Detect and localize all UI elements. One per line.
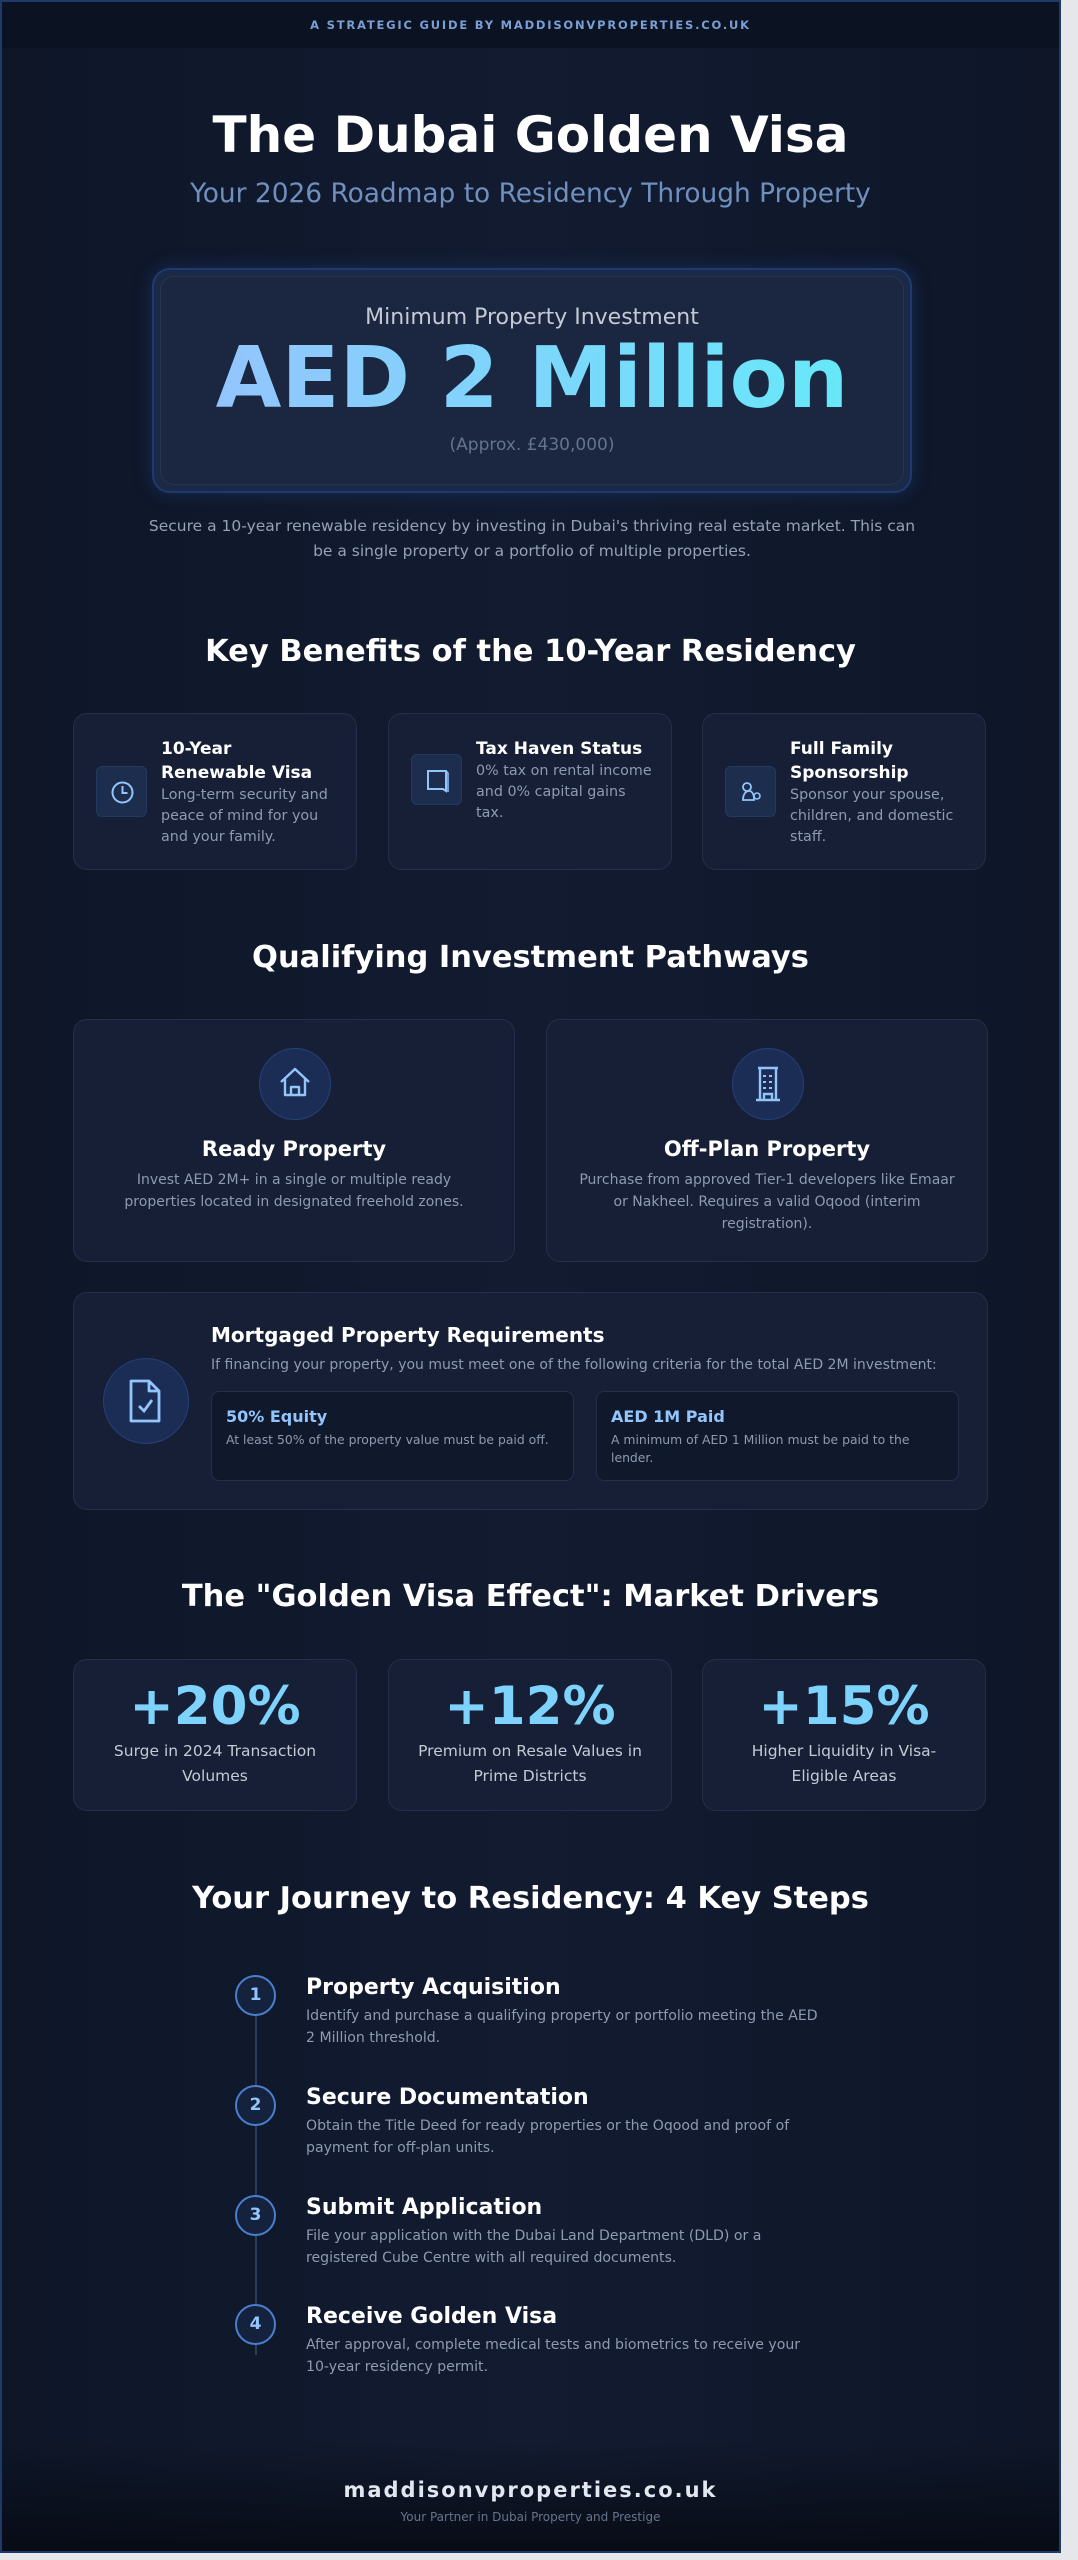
stat: +12%: +12% (444, 1676, 616, 1737)
step 1: Identify and purchase a qualifying property or portfolio meeting the AED 2 Million threshold. (306, 2008, 818, 2046)
icon: clock (96, 766, 147, 817)
stat: +12% (388, 1659, 672, 1811)
heading: pathways: Qualifying Investment Pathways (252, 940, 809, 975)
header strip: A STRATEGIC GUIDE BY MADDISONVPROPERTIES.CO.UK (310, 18, 751, 32)
footer (2, 2442, 1059, 2555)
step 3: 3 (250, 2205, 261, 2225)
stat: +15%: +15% (758, 1676, 930, 1737)
step 4: After approval, complete medical tests and biometrics to receive your 10-year residency permit. (306, 2337, 800, 2375)
panel: off-plan property: Off-Plan Property (664, 1137, 870, 1161)
icon: document check (103, 1358, 189, 1444)
step 1: Property Acquisition (306, 1975, 561, 2000)
title: The Dubai Golden Visa (213, 106, 848, 164)
title: Mortgaged Property Requirements (211, 1323, 605, 1347)
stat: +15% (702, 1659, 986, 1811)
stat: +15%: Higher Liquidity in Visa-Eligible Areas (752, 1742, 936, 1785)
step 3: Submit Application (306, 2195, 542, 2220)
criterion: 50% equity (211, 1391, 574, 1481)
criterion: 50% equity: At least 50% of the property value must be paid off. (226, 1432, 549, 1447)
panel: benefit 2: Tax Haven Status (476, 739, 642, 759)
panel: off-plan property (546, 1019, 988, 1262)
footer: maddisonvproperties.co.uk (343, 2478, 718, 2502)
heading: journey: Your Journey to Residency: 4 Key Steps (192, 1881, 869, 1916)
heading: key benefits: Key Benefits of the 10-Year Residency (205, 634, 856, 669)
panel: benefit 3: Sponsor your spouse, children, and domestic staff. (790, 787, 953, 845)
icon: building (732, 1048, 804, 1120)
intro text: Secure a 10-year renewable residency by investing in Dubai's thriving real estate market. This can be a single property or a portfolio of multiple properties. (149, 517, 915, 560)
panel: benefit 2: 0% tax on rental income and 0% capital gains tax. (476, 763, 652, 821)
icon: document (411, 754, 462, 805)
criterion: AED 1M paid (596, 1391, 959, 1481)
description: Invest AED 2M+ in a single or multiple ready properties located in designated freehold zones. (124, 1172, 464, 1210)
panel: ready property (73, 1019, 515, 1262)
step 1 (235, 1975, 818, 2046)
panel: benefit 1: Long-term security and peace of mind for you and your family. (161, 787, 328, 845)
subtitle: If financing your property, you must meet one of the following criteria for the total AED 2M investment: (211, 1357, 937, 1373)
header strip (2, 2, 1059, 48)
panel: benefit 1: 10-Year Renewable Visa (161, 739, 312, 783)
icon: family (725, 766, 776, 817)
step 4: Receive Golden Visa (306, 2304, 557, 2329)
timeline (235, 1975, 818, 2375)
stat: +20%: +20% (129, 1676, 301, 1737)
panel: benefit 3: Full Family Sponsorship (790, 739, 909, 783)
criterion: AED 1M paid: AED 1M Paid (611, 1407, 725, 1426)
label: Minimum Property Investment (365, 305, 699, 330)
step 2 (235, 2085, 790, 2156)
panel: benefit 1 (73, 713, 357, 870)
icon: house (259, 1048, 331, 1120)
panel: mortgage requirements (73, 1292, 988, 1510)
stat: +20%: Surge in 2024 Transaction Volumes (114, 1742, 316, 1785)
approx: (Approx. £430,000) (450, 435, 614, 455)
hero panel: minimum investment (152, 268, 912, 493)
footer: Your Partner in Dubai Property and Prestige (401, 2510, 660, 2524)
step 3 (235, 2195, 761, 2266)
big amount: AED 2 Million (216, 329, 848, 428)
panel: benefit 3 (702, 713, 986, 870)
criterion: AED 1M paid: A minimum of AED 1 Million must be paid to the lender. (611, 1432, 910, 1465)
step 2: 2 (250, 2095, 261, 2115)
stat: +20% (73, 1659, 357, 1811)
step 2: Secure Documentation (306, 2085, 589, 2110)
step 2: Obtain the Title Deed for ready properties or the Oqood and proof of payment for off-plan units. (306, 2118, 789, 2156)
panel: off-plan property: Purchase from approved Tier-1 developers like Emaar or Nakheel. Requires a valid Oqood (interim registration). (579, 1172, 955, 1232)
step 1: 1 (250, 1985, 261, 2005)
step 4 (235, 2304, 800, 2375)
step 4: 4 (250, 2314, 261, 2334)
stat: +12%: Premium on Resale Values in Prime Districts (418, 1742, 642, 1785)
subtitle: Your 2026 Roadmap to Residency Through Property (190, 178, 871, 209)
title: Ready Property (202, 1137, 386, 1161)
criterion: 50% equity: 50% Equity (226, 1407, 327, 1426)
panel: benefit 2 (388, 713, 672, 870)
heading: market drivers: The "Golden Visa Effect": Market Drivers (182, 1579, 879, 1614)
step 3: File your application with the Dubai Land Department (DLD) or a registered Cube Centre with all required documents. (306, 2228, 761, 2266)
